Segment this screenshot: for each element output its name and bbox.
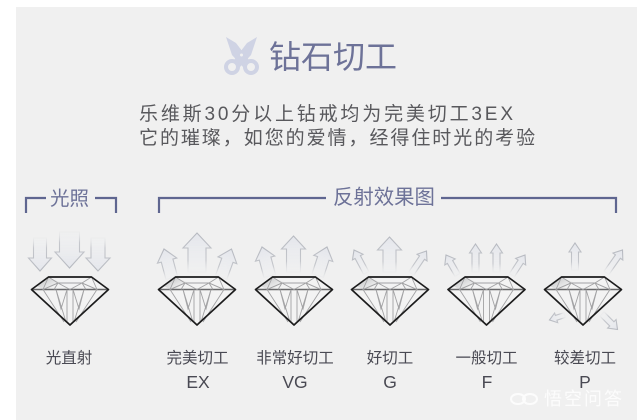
labels: 较差切工	[554, 349, 616, 367]
arrows: VG reflection	[252, 236, 337, 279]
grade codes: VG	[282, 372, 308, 392]
labels: 非常好切工	[256, 349, 334, 367]
grade codes: F	[482, 372, 492, 392]
arrows: F reflection	[441, 244, 530, 278]
grade codes: EX	[186, 372, 210, 392]
bracket heading: reflection	[159, 186, 616, 213]
arrows: incoming light	[28, 232, 110, 271]
labels	[46, 349, 616, 367]
labels: 好切工	[367, 349, 413, 367]
arrows: P reflection	[548, 243, 627, 334]
icon: scissors	[226, 37, 257, 73]
labels: 一般切工	[455, 349, 518, 367]
grade codes: P	[579, 372, 591, 392]
labels: 完美切工	[166, 349, 229, 367]
diamonds	[32, 277, 622, 325]
grade codes: G	[383, 372, 397, 392]
labels: 光直射	[46, 349, 92, 367]
subtitle	[139, 103, 537, 149]
subtitle: 它的璀璨，如您的爱情，经得住时光的考验	[139, 127, 537, 149]
watermark: 悟空问答	[544, 389, 624, 409]
bracket heading: light: 光照	[50, 188, 89, 210]
bracket heading: light	[26, 188, 116, 213]
bracket heading: reflection: 反射效果图	[333, 186, 435, 209]
subtitle: 乐维斯30分以上钻戒均为完美切工3EX	[139, 103, 513, 125]
grade codes	[186, 372, 591, 392]
title: 钻石切工	[269, 39, 397, 75]
arrows: EX reflection	[154, 233, 241, 281]
arrows: G reflection	[349, 237, 431, 277]
